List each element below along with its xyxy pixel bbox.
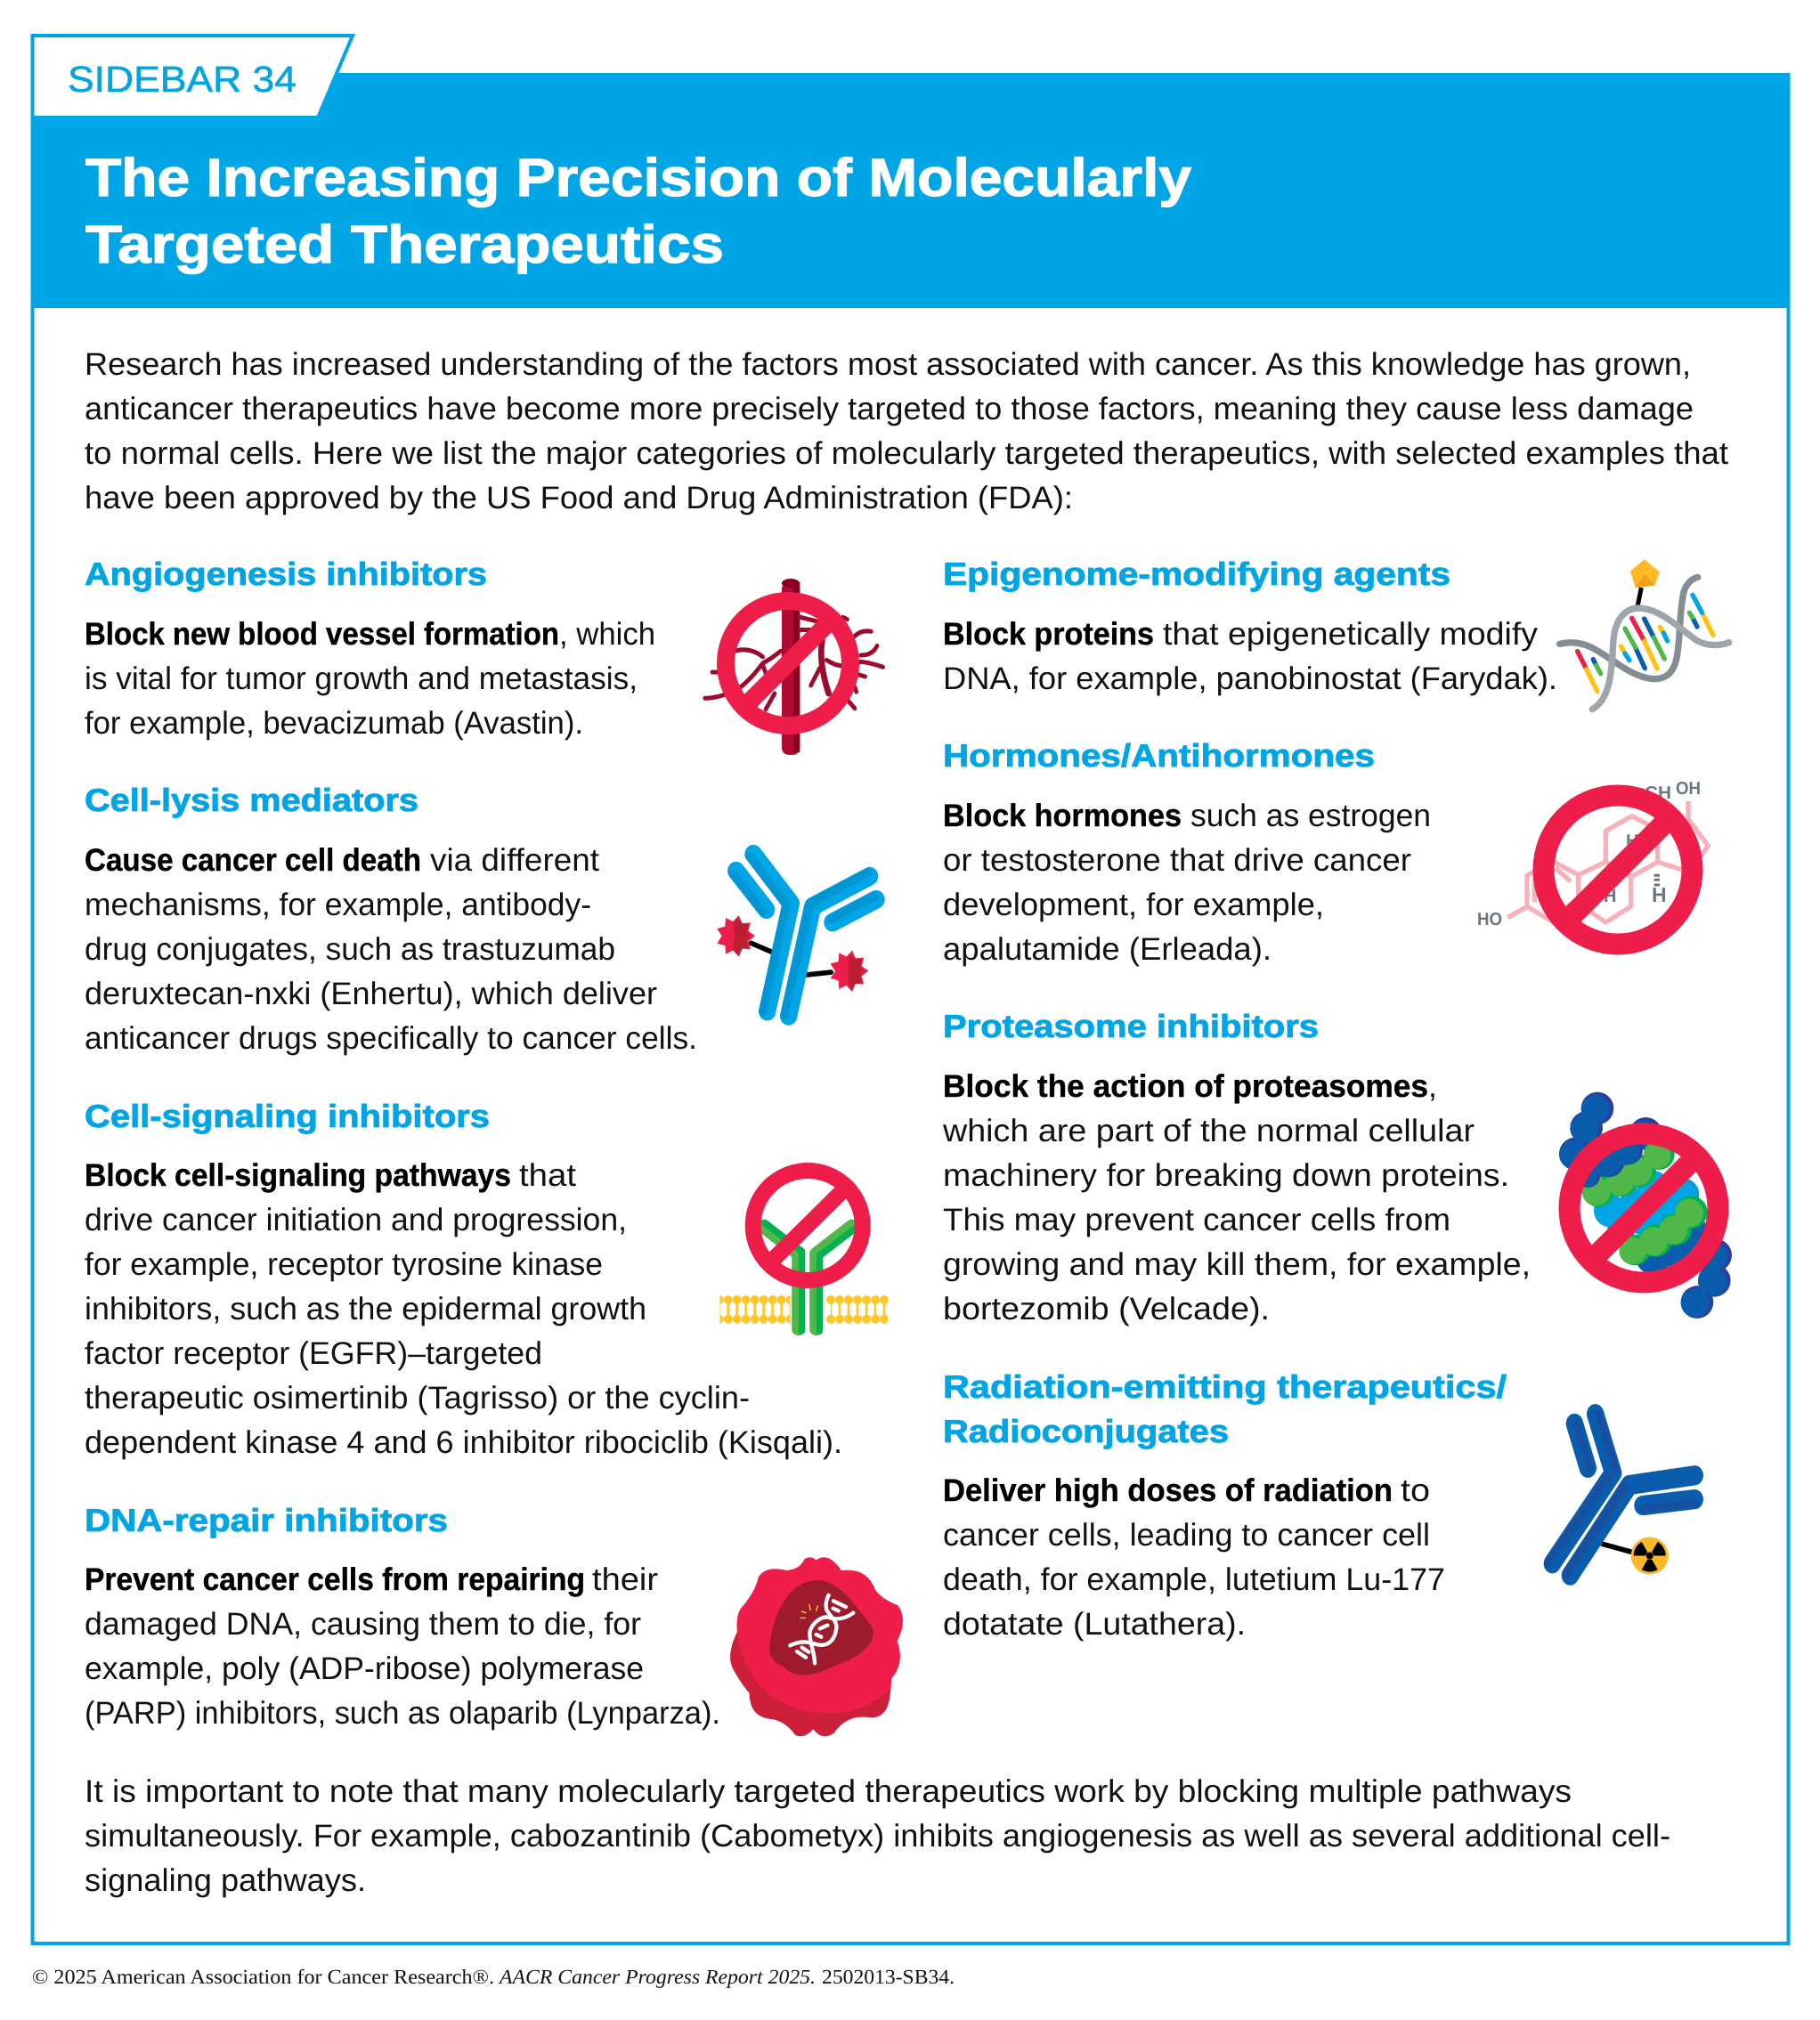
closing note: It is important to note that many molecularly targeted therapeutics work by blocking multiple pathways [85, 1773, 1572, 1809]
description: damaged DNA, causing them to die, for [85, 1606, 641, 1642]
description: dotatate (Lutathera). [943, 1606, 1246, 1642]
description: (PARP) inhibitors, such as olaparib (Lynparza). [85, 1695, 720, 1731]
description [85, 1562, 720, 1731]
description: death, for example, lutetium Lu-177 [943, 1562, 1445, 1597]
description: deruxtecan-nxki (Enhertu), which deliver [85, 976, 657, 1011]
panel: angiogenesis inhibitors [85, 556, 883, 755]
description: for example, receptor tyrosine kinase [85, 1246, 603, 1282]
description: such as estrogen [1190, 798, 1431, 833]
sidebar tab: SIDEBAR 34 [68, 59, 297, 100]
footer credit: © 2025 American Association for Cancer Research®. [32, 1966, 494, 1988]
description: bortezomib (Velcade). [943, 1291, 1270, 1326]
icon: blocked steroid hormone molecule: H [1626, 832, 1638, 851]
description [943, 616, 1557, 696]
title: Targeted Therapeutics [85, 215, 724, 274]
description [85, 842, 697, 1056]
icon: cancer cell with damaged DNA [730, 1557, 903, 1736]
description: is vital for tumor growth and metastasis, [85, 661, 638, 696]
description: their [592, 1562, 658, 1597]
description: Cause cancer cell death [85, 842, 421, 878]
description: example, poly (ADP-ribose) polymerase [85, 1651, 644, 1686]
footer credit: 2502013-SB34. [822, 1966, 955, 1988]
heading: Radioconjugates [943, 1413, 1229, 1449]
description: DNA, for example, panobinostat (Farydak). [943, 661, 1557, 696]
icon: blocked steroid hormone molecule: H [1652, 883, 1667, 906]
panel: cell-lysis mediators [85, 782, 876, 1056]
intro text: anticancer therapeutics have become more precisely targeted to those factors, meaning they cause less damage [85, 391, 1694, 426]
description [85, 616, 655, 741]
title [85, 148, 1192, 274]
icon: blocked steroid hormone molecule: H [1604, 887, 1616, 906]
description: machinery for breaking down proteins. [943, 1157, 1509, 1193]
intro text [85, 346, 1728, 515]
panel: cell-signaling inhibitors [85, 1098, 894, 1460]
panel: DNA-repair inhibitors [85, 1502, 903, 1736]
sidebar tab [32, 36, 353, 118]
description: , [1428, 1068, 1437, 1104]
heading: Cell-lysis mediators [85, 782, 418, 818]
heading: Angiogenesis inhibitors [85, 556, 487, 592]
description: drive cancer initiation and progression, [85, 1202, 627, 1237]
icon: blocked blood vessel [705, 579, 883, 755]
intro text: to normal cells. Here we list the major categories of molecularly targeted therapeutics, with selected examples that [85, 435, 1728, 471]
description: Prevent cancer cells from repairing [85, 1562, 585, 1597]
description: Block hormones [943, 798, 1182, 833]
icon: blocked steroid hormone molecule: CH [1645, 783, 1671, 803]
footer credit: AACR Cancer Progress Report 2025. [498, 1966, 816, 1988]
description: therapeutic osimertinib (Tagrisso) or the cyclin- [85, 1380, 750, 1416]
heading: Hormones/Antihormones [943, 737, 1375, 774]
heading: Radiation-emitting therapeutics/ [943, 1368, 1507, 1405]
icon: blocked steroid hormone molecule: HO [1477, 910, 1502, 929]
closing note [85, 1773, 1670, 1898]
description: that [519, 1157, 576, 1193]
description: Block the action of proteasomes [943, 1068, 1428, 1104]
icon: blocked steroid hormone molecule [1477, 779, 1708, 944]
heading: DNA-repair inhibitors [85, 1502, 448, 1538]
description: dependent kinase 4 and 6 inhibitor ribociclib (Kisqali). [85, 1424, 842, 1460]
icon: blocked membrane receptor [719, 1171, 894, 1331]
description: drug conjugates, such as trastuzumab [85, 931, 615, 967]
description: , which [559, 616, 655, 652]
description: to [1401, 1472, 1430, 1508]
icon: antibody-drug conjugate [717, 854, 876, 1016]
description: via different [430, 842, 599, 878]
description: anticancer drugs specifically to cancer cells. [85, 1020, 697, 1056]
description: cancer cells, leading to cancer cell [943, 1517, 1430, 1553]
header band [32, 36, 1789, 308]
description: factor receptor (EGFR)–targeted [85, 1335, 542, 1371]
description: apalutamide (Erleada). [943, 931, 1272, 967]
description: inhibitors, such as the epidermal growth [85, 1291, 646, 1326]
icon: blocked proteasome [1559, 1092, 1732, 1318]
description: that epigenetically modify [1163, 616, 1538, 652]
description [85, 1157, 842, 1460]
heading: Proteasome inhibitors [943, 1008, 1319, 1044]
panel: hormones/antihormones [943, 737, 1708, 967]
description: Block proteins [943, 616, 1154, 652]
description [943, 798, 1431, 967]
closing note: signaling pathways. [85, 1862, 366, 1898]
description: or testosterone that drive cancer [943, 842, 1411, 878]
icon: modified DNA helix [1560, 559, 1729, 710]
heading: Epigenome-modifying agents [943, 556, 1450, 592]
description: mechanisms, for example, antibody- [85, 887, 591, 922]
icon: blocked steroid hormone molecule: OH [1676, 779, 1701, 799]
heading [943, 1368, 1507, 1449]
title: The Increasing Precision of Molecularly [85, 148, 1192, 207]
panel: radiation-emitting therapeutics [943, 1368, 1694, 1642]
intro text: Research has increased understanding of the factors most associated with cancer. As this knowledge has grown, [85, 346, 1691, 382]
description: for example, bevacizumab (Avastin). [85, 705, 583, 741]
description: Block new blood vessel formation [85, 616, 559, 652]
intro text: have been approved by the US Food and Drug Administration (FDA): [85, 480, 1073, 515]
panel: proteasome inhibitors [942, 1008, 1732, 1326]
description [943, 1472, 1445, 1642]
description: which are part of the normal cellular [942, 1113, 1475, 1148]
description: Block cell-signaling pathways [85, 1157, 511, 1193]
description: growing and may kill them, for example, [943, 1246, 1531, 1282]
panel: epigenome-modifying agents [943, 556, 1729, 710]
description: This may prevent cancer cells from [943, 1202, 1450, 1237]
heading: Cell-signaling inhibitors [85, 1098, 490, 1134]
icon: radioconjugate antibody [1548, 1414, 1694, 1576]
footer credit [32, 1966, 955, 1988]
closing note: simultaneously. For example, cabozantinib (Cabometyx) inhibits angiogenesis as well as several additional cell- [85, 1818, 1670, 1854]
description [942, 1068, 1531, 1326]
description: development, for example, [943, 887, 1324, 922]
description: Deliver high doses of radiation [943, 1472, 1393, 1508]
